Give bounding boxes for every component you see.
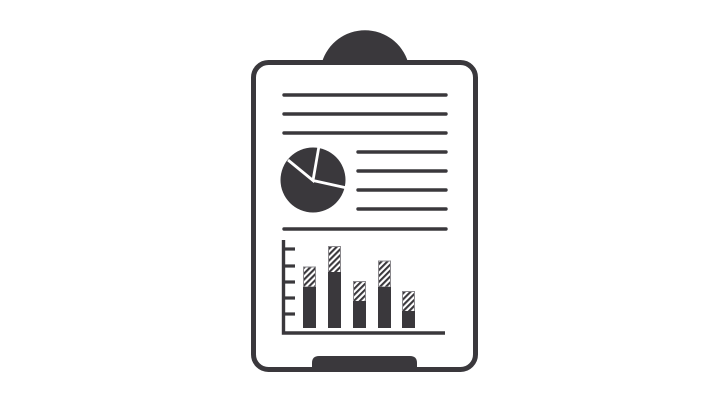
- bar 2: [328, 246, 341, 328]
- bottom tab: [312, 356, 417, 370]
- clipboard clip: [322, 30, 408, 62]
- axis ticks: [284, 249, 295, 314]
- bar chart: [284, 240, 445, 333]
- icon: clipboard: [254, 30, 476, 370]
- bar 4: [378, 261, 391, 328]
- axes: [284, 240, 445, 333]
- text lines: beside pie: [358, 152, 446, 209]
- bar 5: [402, 292, 415, 328]
- text lines: top: [284, 95, 446, 133]
- bar 1: [303, 267, 316, 328]
- clipboard board: [254, 62, 476, 370]
- divider line: [284, 227, 446, 231]
- bar 3: [353, 282, 366, 328]
- pie chart: [280, 146, 347, 212]
